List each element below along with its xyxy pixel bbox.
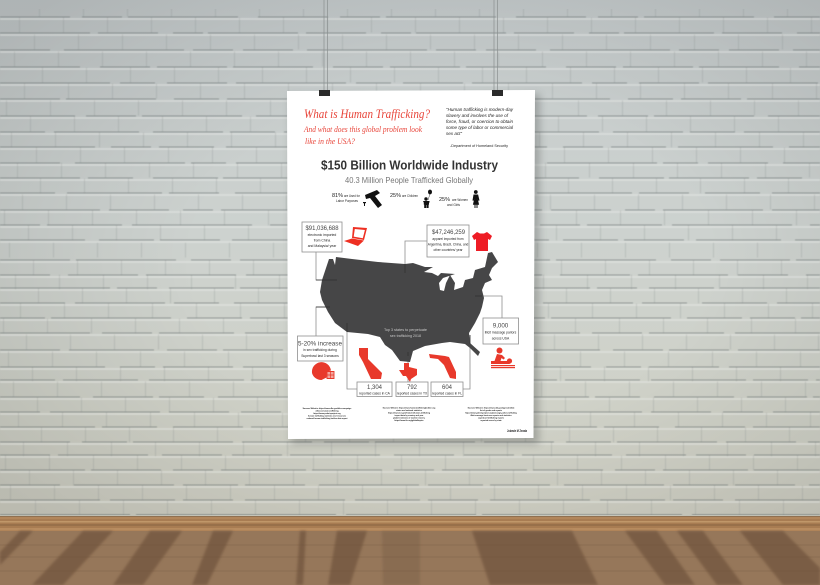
stat: labor: 81%	[332, 193, 343, 199]
handwritten heading: like in the USA?	[305, 136, 356, 146]
box: superbowl	[298, 336, 343, 361]
sources column 1	[303, 407, 352, 420]
quote: sex act"	[446, 131, 462, 136]
sources column 1: https://www.polarisproject.org	[313, 412, 341, 415]
icon: California	[359, 348, 382, 379]
icon: laptop	[344, 227, 367, 246]
box: apparel: apparel imported from	[432, 237, 464, 241]
handwritten heading	[303, 106, 430, 146]
icon: hammer	[363, 190, 382, 208]
box: California cases: 1,304	[367, 385, 383, 391]
sources column 1: human trafficking statistics and resources	[308, 414, 346, 418]
box: superbowl: in sex trafficking during	[303, 348, 337, 352]
box: Texas cases: reported cases in TX	[397, 392, 428, 396]
box: apparel: $47,246,259	[432, 229, 466, 236]
sources column 3: reported cases by state	[480, 419, 502, 422]
box: massage parlors	[483, 318, 518, 344]
box: Texas cases: 792	[407, 385, 418, 391]
stat: children	[390, 193, 418, 199]
sources column 3: superbowl trafficking reports	[478, 416, 504, 420]
stat: women	[439, 197, 468, 207]
icon: t-shirt	[472, 232, 492, 251]
stat: labor	[332, 193, 361, 203]
box: Florida cases: 604	[442, 385, 453, 391]
box: electronics: and Malaysia/ year	[308, 244, 337, 248]
sources column 1: national human trafficking hotline data report	[307, 417, 348, 420]
box: superbowl: Superbowl last 3 seasons	[301, 354, 339, 358]
box: electronics: from China	[314, 238, 330, 242]
poster	[287, 90, 535, 439]
stat: women: are Women	[452, 198, 468, 202]
icon: Texas	[399, 363, 417, 382]
map caption	[384, 328, 427, 338]
stat: women: and Girls	[447, 203, 460, 207]
sources column 3: https://www.polarisproject.org/massage-parlor-trafficking	[465, 412, 518, 414]
box: massage parlors: illicit massage parlors	[485, 330, 517, 334]
box: apparel	[427, 225, 469, 257]
quote: slavery and involves the use of	[446, 113, 509, 118]
handwritten heading: What is Human Trafficking?	[304, 106, 430, 121]
sources column 2: Sources Website: https://www.humantraffickinghotline.org	[383, 406, 436, 410]
sources column 2: import data by country and year	[395, 414, 424, 417]
hanging wires	[324, 0, 498, 90]
box: California cases	[357, 382, 392, 396]
box: electronics: $91,036,688	[306, 225, 339, 232]
sources column 3: illicit massage business reports and statistics	[470, 414, 512, 417]
stat: children: 25%	[390, 193, 401, 199]
credit: Jolande M Zevala	[507, 429, 527, 433]
sources column 3: list of goods and reports	[480, 409, 502, 412]
box: apparel: Argentina, Brazil, China, and	[428, 242, 469, 246]
icon: massage	[491, 348, 515, 368]
right binder clip	[492, 90, 503, 96]
baseboard	[0, 516, 820, 531]
box: Texas cases	[396, 382, 428, 396]
stat: labor: Labor Purposes	[336, 199, 358, 203]
box: Florida cases: reported cases in FL	[432, 392, 462, 396]
box: Florida cases	[431, 382, 463, 396]
quote: -Department of Homeland Security	[450, 143, 508, 148]
handwritten heading: And what does this global problem look	[303, 124, 422, 134]
sources column 2: states and national statistics	[396, 409, 422, 412]
subtitle: 40.3 Million People Trafficked Globally	[345, 175, 474, 185]
icon: Florida	[429, 354, 456, 379]
main title: $150 Billion Worldwide Industry	[321, 158, 499, 172]
sources column 3: Sources Website: https://www.dol.gov/agencies/ilab	[468, 406, 515, 410]
sources column 2: https://www.ilo.org/global/topics	[394, 419, 424, 422]
stat: women: 25%	[439, 197, 450, 203]
connector lines	[316, 241, 502, 389]
icon: child with balloon	[423, 190, 432, 208]
quote: "Human trafficking is modern-day	[446, 107, 514, 112]
quote	[446, 107, 514, 148]
box: apparel: other countries/ year	[433, 248, 463, 252]
sources column 2: global estimates of modern slavery	[393, 416, 426, 420]
box: massage parlors: across USA	[492, 336, 510, 340]
sources column 2: https://www.ice.gov/features/human-trafficking	[388, 412, 431, 414]
left binder clip	[319, 90, 330, 96]
box: electronics	[302, 222, 342, 252]
map caption: Top 3 states to perpetuate	[384, 328, 427, 332]
box: California cases: reported cases in CA	[359, 392, 391, 396]
box: electronics: electronic imported	[308, 233, 336, 237]
wooden floor	[0, 531, 820, 585]
stat: labor: are Used for	[344, 194, 361, 198]
icon: woman	[472, 190, 480, 208]
box: massage parlors: 9,000	[493, 322, 509, 330]
stat: children: are Children	[402, 194, 418, 198]
sources column 3	[465, 406, 518, 422]
sources column 1: Sources Website: https://www.dhs.gov/blue-campaign	[303, 407, 352, 410]
box: superbowl: 5-20% increase	[298, 341, 342, 348]
quote: force, fraud, or coercion to obtain	[446, 119, 513, 124]
connector ends over map	[316, 264, 482, 356]
quote: some type of labor or commercial	[446, 125, 514, 130]
sources column 2	[383, 406, 436, 422]
sources column 1: what-is-human-trafficking	[315, 410, 339, 412]
map caption: sex trafficking 2018	[390, 334, 421, 338]
USA map	[320, 252, 498, 362]
poster shadow	[290, 94, 540, 444]
icon: football helmet	[312, 362, 334, 380]
